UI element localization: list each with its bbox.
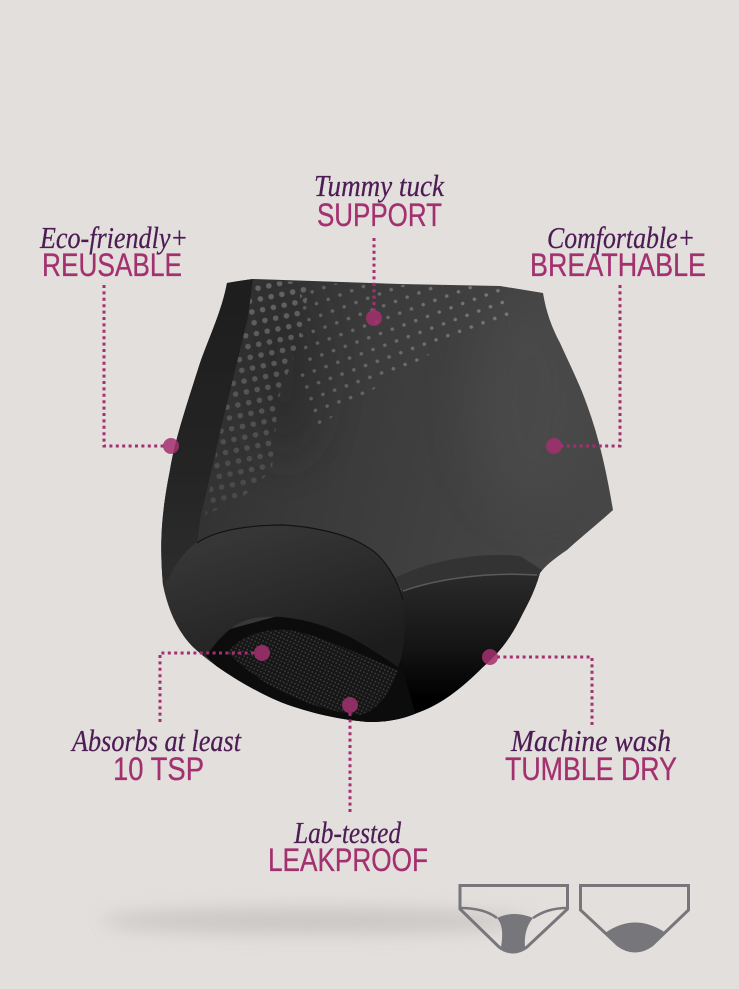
marker (254, 645, 270, 661)
connector (372, 238, 376, 312)
script label: Lab-tested (293, 815, 401, 850)
garment: high-waisted black underwear (150, 270, 630, 730)
marker (366, 310, 382, 326)
gusset seam (403, 574, 537, 591)
fabric highlight (544, 300, 588, 408)
callout: comfortable breathable (530, 220, 706, 454)
large perforation dots (205, 281, 310, 515)
connector (160, 653, 256, 722)
lower black area (206, 616, 416, 722)
script label: Machine wash (510, 723, 671, 758)
caps label: 10 TSP (113, 751, 204, 787)
ground shadow (100, 908, 530, 934)
marker (163, 438, 179, 454)
mesh lining (227, 630, 398, 715)
callout: tummy tuck support (314, 168, 445, 326)
caps label: TUMBLE DRY (505, 751, 677, 787)
connector (348, 713, 352, 812)
script label: Absorbs at least (70, 723, 242, 758)
gusset fill (605, 922, 666, 951)
script label: Comfortable+ (547, 220, 695, 255)
script label: Tummy tuck (314, 168, 445, 203)
icon: front view of brief (460, 886, 568, 952)
caps label: REUSABLE (42, 247, 182, 283)
connector (104, 285, 165, 446)
gusset fill (497, 914, 533, 952)
connector (497, 657, 592, 726)
front gusset band (395, 555, 545, 592)
marker (342, 697, 358, 713)
callout: machine wash tumble dry (482, 649, 677, 787)
leg lines (460, 908, 568, 918)
front gusset (347, 575, 538, 722)
side panel (161, 279, 253, 584)
small perforation dots (300, 283, 510, 430)
main fabric (150, 270, 630, 730)
icon: back view of brief (580, 886, 688, 951)
caps label: BREATHABLE (530, 247, 706, 283)
fabric shade near seam (268, 321, 304, 434)
flap edge line (197, 525, 403, 600)
callout: eco-friendly reusable (39, 220, 188, 454)
back flap (165, 525, 405, 667)
marker (546, 438, 562, 454)
callout: lab-tested leakproof (268, 697, 428, 878)
callout: absorbs 10 tsp (70, 645, 270, 787)
connector (560, 285, 620, 446)
brief outline (460, 886, 568, 952)
caps label: LEAKPROOF (268, 842, 428, 878)
script label: Eco-friendly+ (39, 220, 188, 255)
brief outline (580, 886, 688, 951)
caps label: SUPPORT (317, 197, 442, 233)
marker (482, 649, 498, 665)
